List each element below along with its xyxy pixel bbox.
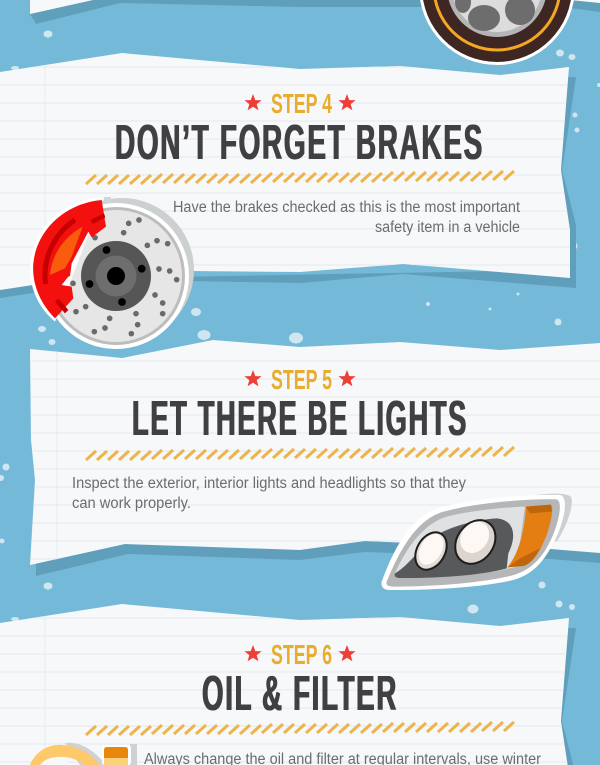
divider stripes [86, 722, 514, 735]
icon: oil can and bottle [30, 743, 137, 765]
disc holes [70, 217, 179, 336]
heading: step 5 label: STEP 5 [271, 364, 332, 395]
heading: step 6 label [244, 639, 356, 670]
text: step 4 description: Have the brakes checked as this is the most important [173, 199, 521, 216]
heading: oil and filter: OIL & FILTER [202, 667, 398, 721]
panel: step 5 [0, 340, 600, 576]
text: step 5 description: Inspect the exterior, interior lights and headlights so that they [72, 475, 466, 492]
divider stripes [86, 447, 514, 460]
heading: step 6 label: STEP 6 [271, 639, 332, 670]
panel: step 3 remainder [30, 0, 600, 24]
panel: step 6 [0, 600, 600, 765]
heading: step 4 label: STEP 4 [271, 88, 332, 119]
disc hub [81, 241, 151, 311]
panel: step 4 [0, 50, 600, 300]
heading: step 4 label [244, 88, 356, 119]
text: step 5 description: can work properly. [72, 495, 191, 512]
icon: headlight [381, 494, 572, 590]
divider stripes [86, 171, 514, 184]
text: step 4 description [173, 199, 521, 236]
icon: wheel [419, 0, 575, 65]
icon: brake disc [30, 197, 194, 349]
brake caliper [30, 197, 106, 322]
text: step 5 description [72, 475, 466, 512]
heading: step 5 label [244, 364, 356, 395]
text: step 4 description: safety item in a vehicle [375, 219, 520, 236]
